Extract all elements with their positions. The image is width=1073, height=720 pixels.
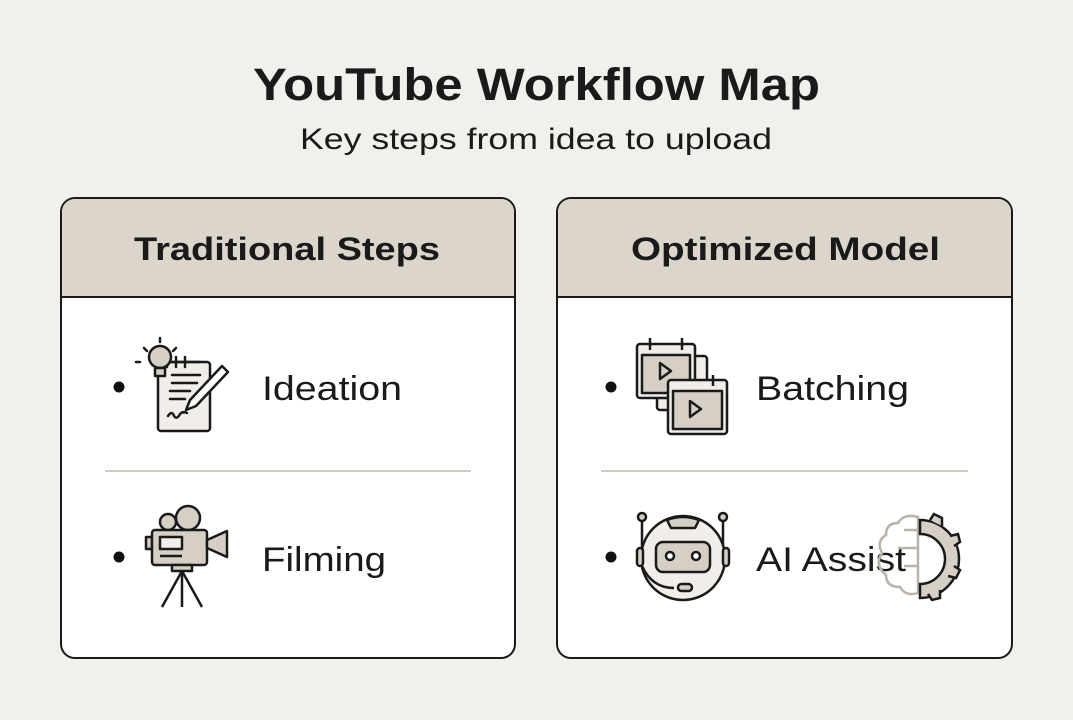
- title: YouTube Workflow Map: [253, 59, 820, 110]
- item: batching: [606, 338, 909, 434]
- icon: camera on tripod: [146, 506, 227, 607]
- item: ideation: [114, 338, 402, 431]
- icon: batched calendars: [637, 338, 727, 434]
- label: filming: Filming: [262, 541, 386, 579]
- label: batching: Batching: [756, 370, 909, 408]
- subtitle: Key steps from idea to upload: [300, 123, 772, 156]
- panel: traditional steps: [61, 198, 515, 658]
- item: ai assist: [606, 513, 960, 600]
- icon: idea notepad: [136, 338, 228, 431]
- heading: optimized model: Optimized Model: [631, 231, 940, 267]
- panel: optimized model: [557, 198, 1012, 658]
- label: ai assist: AI Assist: [756, 541, 907, 579]
- icon: robot: [637, 513, 729, 600]
- label: ideation: Ideation: [262, 370, 402, 408]
- item: filming: [114, 506, 386, 607]
- icon: brain gear: [879, 514, 960, 600]
- heading: traditional steps: Traditional Steps: [134, 231, 440, 267]
